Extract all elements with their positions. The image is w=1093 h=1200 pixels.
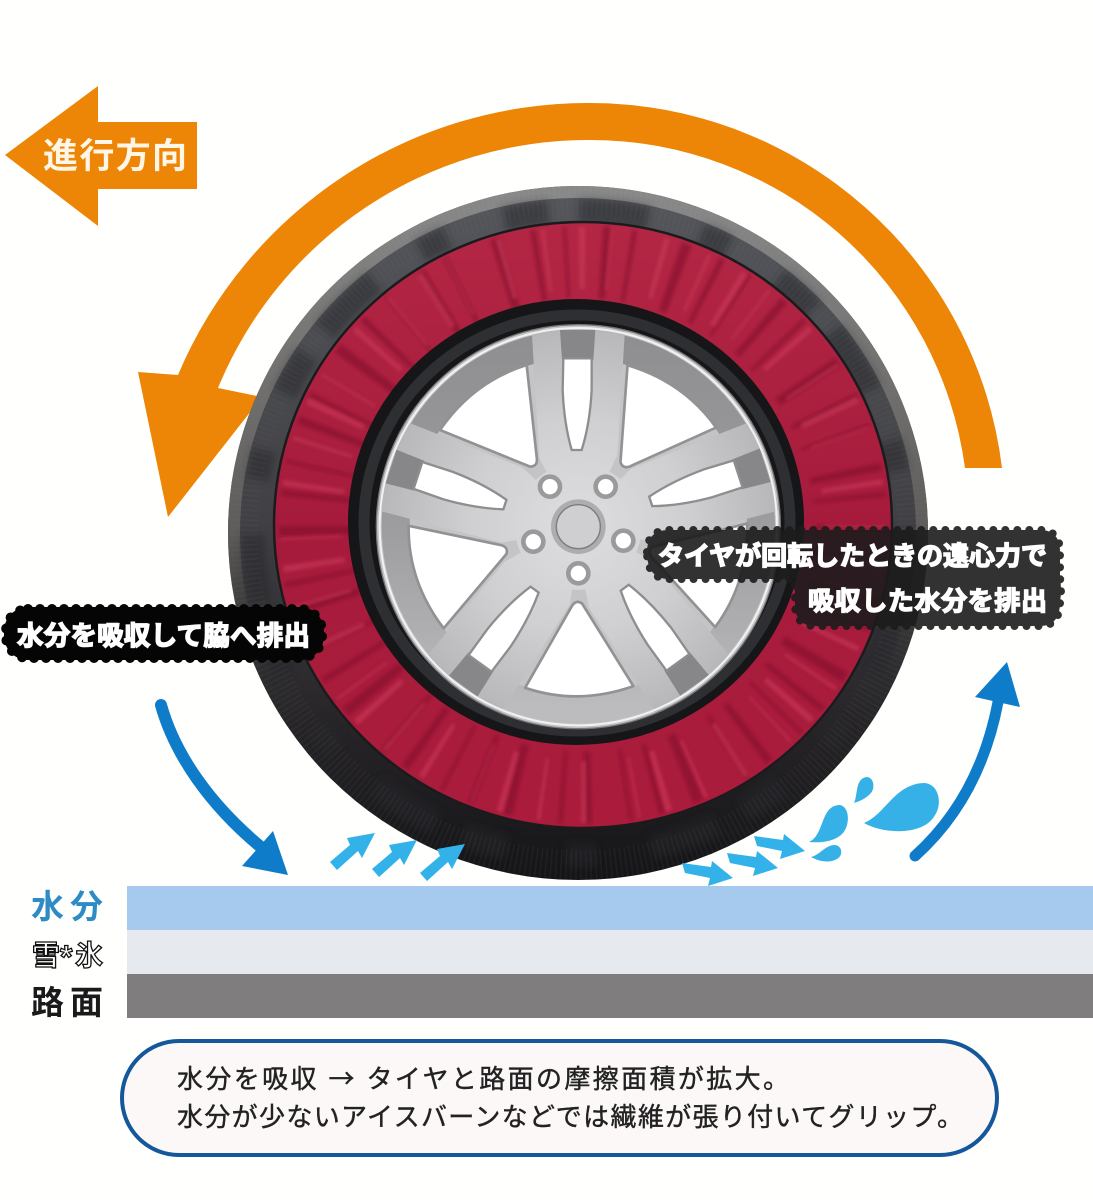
center cap	[551, 499, 606, 554]
callout: centrifugal force expels water: タイヤが回転したときの遠心力で	[658, 541, 1047, 571]
callout: absorb and expel sideways	[4, 607, 324, 660]
wheel large openings	[382, 345, 785, 739]
layer: snow and ice	[127, 930, 1093, 974]
layer: water	[127, 886, 1093, 930]
arrow: orange rotation arc	[138, 103, 1002, 517]
red fabric panel	[274, 222, 892, 828]
label: snow and ice: 氷	[75, 940, 103, 971]
layer diagram: water, snow and ice, road	[31, 886, 1093, 1021]
wheel slot openings	[413, 358, 743, 672]
label: direction of travel: 進行方向	[43, 137, 187, 176]
arrow: direction of travel	[5, 86, 197, 226]
callout: absorb and expel sideways: 水分を吸収して脇へ排出	[17, 621, 310, 651]
arrow: blue water expulsion	[915, 662, 1020, 856]
label: snow and ice: *	[60, 939, 73, 975]
note text line 2: 水分が少ないアイスバーンなどでは繊維が張り付いてグリップ。	[177, 1102, 963, 1132]
label: road: 路面	[31, 984, 103, 1021]
callout: centrifugal force expels water	[647, 530, 1061, 626]
wheel spokes	[376, 329, 780, 714]
callout: centrifugal force expels water: 吸収した水分を排出	[808, 586, 1047, 616]
arrows: water pushed outward	[682, 834, 805, 886]
lug holes	[523, 477, 633, 583]
arrows: water absorbed upward	[330, 833, 465, 881]
black tire ring	[348, 299, 804, 745]
tire with textile snow sock	[228, 186, 928, 880]
icon: water splash drops	[809, 777, 939, 861]
outer black and grey fabric band	[228, 186, 928, 880]
label: water: 水分	[31, 888, 103, 925]
silver alloy wheel	[376, 325, 785, 739]
note text line 1: 水分を吸収 → タイヤと路面の摩擦面積が拡大。	[177, 1059, 789, 1096]
arrow: blue water intake	[161, 705, 288, 875]
label: snow and ice: 雪	[32, 940, 60, 971]
note box	[122, 1041, 997, 1155]
layer: road	[127, 974, 1093, 1018]
